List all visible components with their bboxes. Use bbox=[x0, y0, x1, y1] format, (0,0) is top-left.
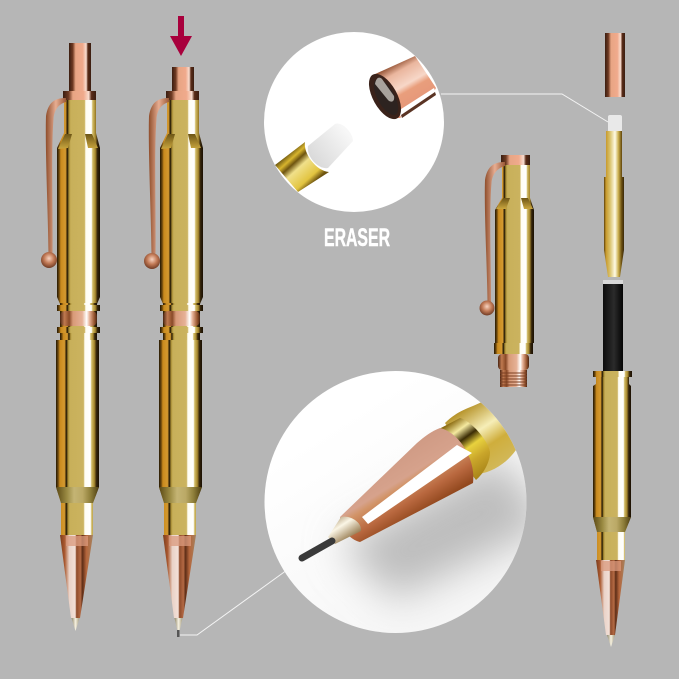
brass sleeve close-up bbox=[275, 142, 329, 192]
pressed push button bbox=[172, 67, 194, 92]
thread bbox=[500, 370, 527, 387]
brass flange close-up bbox=[445, 401, 518, 474]
copper bulge bbox=[498, 354, 529, 370]
pen 2 upper barrel bbox=[160, 99, 203, 304]
circle bbox=[264, 32, 444, 212]
copper nose bbox=[596, 560, 625, 635]
writing tip bbox=[607, 635, 615, 647]
collar bbox=[63, 91, 96, 100]
black tube bbox=[603, 284, 623, 371]
copper nose bbox=[60, 535, 93, 618]
collar bbox=[166, 91, 199, 100]
pen 1 lower barrel bbox=[56, 340, 99, 535]
clip ball bbox=[144, 253, 160, 269]
clip ball bbox=[41, 252, 57, 268]
magnified pen tip bbox=[302, 401, 518, 558]
label: ERASER: ERASER bbox=[324, 224, 390, 252]
brass band close-up bbox=[437, 418, 490, 480]
copper nose bbox=[163, 535, 196, 618]
arrow: press down bbox=[170, 16, 192, 56]
clip bbox=[149, 98, 169, 254]
inner brass rod bbox=[604, 131, 624, 277]
leader line to tip detail bbox=[180, 570, 287, 635]
circle bbox=[264, 371, 526, 633]
clip bbox=[46, 98, 66, 254]
lower barrel bbox=[593, 377, 631, 560]
barrel collar bbox=[593, 371, 632, 377]
callout: tip detail bbox=[264, 371, 550, 633]
writing tip bbox=[72, 618, 80, 631]
pen shadow bbox=[340, 455, 550, 600]
cap collar bbox=[501, 155, 530, 165]
pen 1: extended button bbox=[41, 43, 100, 631]
centre rings bbox=[57, 303, 100, 340]
detached copper cap bbox=[605, 33, 625, 97]
clip bbox=[485, 162, 505, 302]
pen 2: pressed button with lead bbox=[144, 67, 203, 637]
white ring bbox=[603, 280, 623, 285]
white eraser bbox=[608, 115, 622, 132]
pen 1 upper barrel bbox=[57, 99, 100, 304]
clip ball bbox=[480, 300, 494, 316]
cone highlight bbox=[362, 445, 472, 524]
pen 2 lower barrel bbox=[159, 340, 202, 535]
silver nose close-up bbox=[328, 517, 361, 544]
cap barrel bbox=[495, 164, 534, 343]
callout: eraser detail bbox=[264, 32, 444, 212]
leader line to eraser detail bbox=[441, 94, 608, 122]
centre rings bbox=[160, 303, 203, 340]
copper cone close-up bbox=[340, 428, 473, 542]
eraser close-up bbox=[308, 124, 353, 168]
copper cap close-up bbox=[362, 56, 436, 124]
push button bbox=[69, 43, 91, 92]
middle pen cap section bbox=[480, 155, 534, 387]
writing tip bbox=[174, 618, 182, 631]
lead bbox=[302, 541, 332, 558]
brass ring bbox=[494, 343, 533, 354]
exploded pen bbox=[593, 33, 632, 647]
extended lead bbox=[177, 630, 180, 637]
